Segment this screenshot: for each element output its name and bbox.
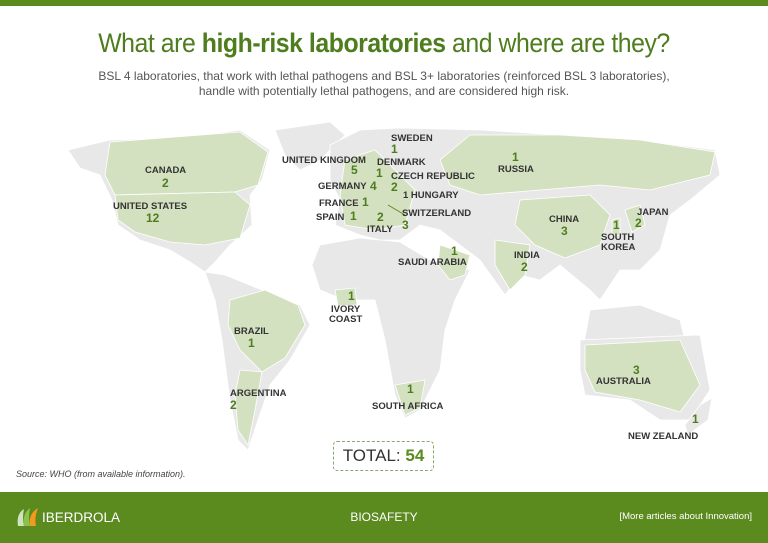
country labels: DENMARK [377, 157, 426, 168]
country labels: 2 [377, 210, 384, 224]
country labels: SPAIN [316, 212, 344, 223]
country labels: IVORY [331, 304, 361, 315]
country labels: SAUDI ARABIA [398, 257, 467, 268]
country labels: 1 [512, 150, 519, 164]
country labels [113, 133, 699, 442]
section name: BIOSAFETY [350, 510, 418, 524]
country labels: UNITED KINGDOM [282, 155, 366, 166]
link: [More articles about Innovation] [619, 511, 752, 522]
country labels: ARGENTINA [230, 388, 287, 399]
country labels: 1 HUNGARY [403, 190, 459, 201]
country labels: 2 [635, 216, 642, 230]
country labels: AUSTRALIA [596, 376, 651, 387]
logo [18, 508, 120, 526]
country labels: SWITZERLAND [402, 208, 471, 219]
country labels: 1 [350, 209, 357, 223]
country labels: 3 [402, 218, 409, 232]
country labels: CANADA [145, 165, 186, 176]
country labels: CZECH REPUBLIC [391, 171, 475, 182]
country labels: 4 [370, 179, 377, 193]
logo: IBERDROLA [42, 510, 120, 525]
country labels: 1 [391, 142, 398, 156]
country labels: 5 [351, 163, 358, 177]
country labels: 1 [613, 218, 620, 232]
source: Source: WHO (from available information). [16, 469, 186, 479]
country labels: 1 [348, 289, 355, 303]
title: What are high-risk laboratories and where are they? [98, 28, 670, 58]
country labels: 2 [521, 260, 528, 274]
footer [0, 492, 768, 543]
country labels: SOUTH [601, 232, 634, 243]
country labels: ITALY [367, 224, 394, 235]
country labels: SWEDEN [391, 133, 433, 144]
country labels: 3 [561, 224, 568, 238]
total: TOTAL: 54 [343, 446, 424, 465]
country labels: BRAZIL [234, 326, 269, 337]
country labels: CHINA [549, 214, 579, 225]
country labels: 1 [407, 382, 414, 396]
country labels: 2 [391, 180, 398, 194]
country labels: COAST [329, 314, 362, 325]
country labels: 1 [362, 195, 369, 209]
country labels: 12 [146, 211, 160, 225]
subtitle: BSL 4 laboratories, that work with lethal pathogens and BSL 3+ laboratories (reinforced BSL 3 laboratories), handle with potentially lethal pathogens, and are considered high risk. [98, 69, 670, 98]
total [333, 441, 434, 471]
country labels: INDIA [514, 250, 540, 261]
country labels: 2 [230, 398, 237, 412]
country labels: 3 [633, 363, 640, 377]
country labels: UNITED STATES [113, 201, 187, 212]
country labels: 1 [692, 412, 699, 426]
country labels: 1 [376, 166, 383, 180]
country labels: FRANCE [319, 198, 359, 209]
country labels: 1 [451, 244, 458, 258]
country labels: KOREA [601, 242, 635, 253]
country labels: RUSSIA [498, 164, 534, 175]
country labels: GERMANY [318, 181, 367, 192]
country labels: 2 [162, 176, 169, 190]
country labels: 1 [248, 336, 255, 350]
country labels: NEW ZEALAND [628, 431, 698, 442]
country labels: SOUTH AFRICA [372, 401, 444, 412]
country labels: JAPAN [637, 207, 669, 218]
